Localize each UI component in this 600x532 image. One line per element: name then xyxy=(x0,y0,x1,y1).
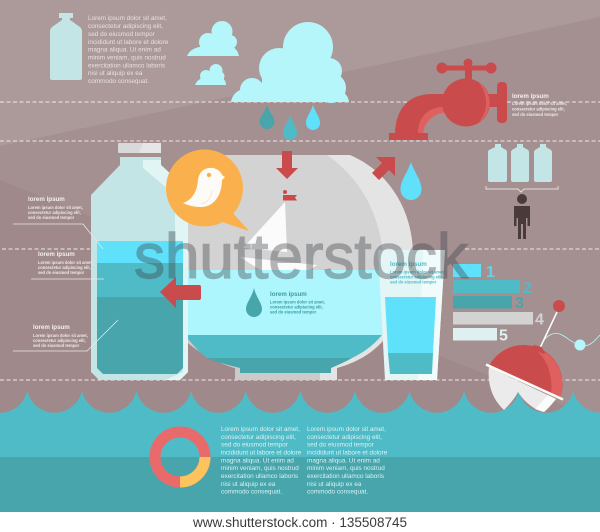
text block: bottom left: commodo consequat. xyxy=(221,489,282,496)
label: top bottle layer: sed do eiusmod tempor xyxy=(28,215,75,220)
text block: bottom right: commodo consequat. xyxy=(307,489,368,496)
bar chart: 2 xyxy=(523,280,532,297)
bowl drop xyxy=(246,288,262,317)
bar chart: 5 xyxy=(499,328,508,344)
label: middle bottle layer: lorem ipsum xyxy=(38,251,75,258)
label: faucet: sed do eiusmod tempor xyxy=(512,112,559,117)
icon: small cloud xyxy=(187,21,239,56)
large bottle xyxy=(91,143,188,380)
label: faucet: lorem ipsum xyxy=(512,93,549,100)
bowl label: Lorem ipsum dolor sit amet, xyxy=(270,300,325,304)
footer text: www.shutterstock.com · 135508745 xyxy=(192,515,407,530)
diagonal arrow xyxy=(372,157,395,180)
icon: person xyxy=(514,194,530,239)
text block: bottom right: nisi ut aliquip ex ea xyxy=(307,481,362,488)
text block: bottom right: consectetur adipiscing elit, xyxy=(307,434,382,441)
left arrow xyxy=(160,277,201,308)
glass label: Lorem ipsum dolor sit amet, xyxy=(390,270,445,274)
text block: bottom right: magna aliqua. Ut enim ad xyxy=(307,457,380,464)
text block: bottom left: Lorem ipsum dolor sit amet, xyxy=(221,426,300,433)
icon: faucet xyxy=(389,58,507,140)
bowl label: lorem ipsum xyxy=(270,291,307,298)
bowl label: consectetur adipiscing elit, xyxy=(270,304,323,310)
sea xyxy=(0,391,600,512)
text block: bottom left: nisi ut aliquip ex ea xyxy=(221,481,276,488)
label: bottom bottle layer: sed do eiusmod tempor xyxy=(33,343,80,348)
icon: tiny cloud xyxy=(195,64,226,85)
text block: top intro: minim veniam, quis nostrud xyxy=(88,54,166,61)
glass label: sed do eiusmod tempor xyxy=(390,280,437,284)
icon: three bottles xyxy=(488,144,552,182)
leader lines xyxy=(13,224,118,351)
text block: bottom right: sed do eiusmod tempor xyxy=(307,442,375,449)
text block: top intro: nisi ut aliquip ex ea xyxy=(88,70,143,77)
icon: small bottle xyxy=(50,13,82,80)
bar chart xyxy=(453,264,544,344)
text block: top intro: exercitation ullamco laboris xyxy=(88,62,165,69)
glass label: consectetur adipiscing elit, xyxy=(390,274,443,280)
bracket xyxy=(486,186,558,192)
speech bubble with bird xyxy=(166,150,249,231)
bowl label: sed do eiusmod tempor xyxy=(270,310,317,314)
icon: rain drops xyxy=(260,105,320,140)
fishing float xyxy=(486,300,600,412)
text block: bottom left: sed do eiusmod tempor xyxy=(221,442,289,449)
text block: top intro: consectetur adipiscing elit, xyxy=(88,23,163,30)
text block: bottom left: minim veniam, quis nostrud xyxy=(221,465,299,472)
glass xyxy=(378,250,445,380)
label: middle bottle layer: Lorem ipsum dolor sit amet, xyxy=(38,260,93,265)
fish bowl xyxy=(188,155,413,380)
text block: bottom right: exercitation ullamco laboris xyxy=(307,473,384,480)
label: top bottle layer: consectetur adipiscing elit, xyxy=(28,210,81,215)
bar chart: 3 xyxy=(515,295,524,312)
label: bottom bottle layer: Lorem ipsum dolor sit amet, xyxy=(33,333,88,338)
text block: top intro: Lorem ipsum dolor sit amet, xyxy=(88,15,167,22)
label: middle bottle layer: consectetur adipiscing elit, xyxy=(38,265,91,270)
label: top bottle layer: Lorem ipsum dolor sit amet, xyxy=(28,205,83,210)
bar chart: 1 xyxy=(486,264,495,281)
down arrow xyxy=(276,151,298,179)
text block: bottom right: Lorem ipsum dolor sit amet, xyxy=(307,426,386,433)
icon: bird xyxy=(183,168,225,207)
footer band xyxy=(0,512,600,532)
label: bottom bottle layer: lorem ipsum xyxy=(33,324,70,331)
watermark: shutterstock xyxy=(134,222,468,292)
bar chart: 4 xyxy=(535,312,544,328)
text block: top intro: incididunt ut labore et dolore xyxy=(88,39,169,46)
text block: bottom right: incididunt ut labore et dolore xyxy=(307,449,388,456)
label: faucet: Lorem ipsum dolor sit amet, xyxy=(512,101,567,106)
text block: top intro: sed do eiusmod tempor xyxy=(88,31,156,38)
label: middle bottle layer: sed do eiusmod tempor xyxy=(38,270,85,275)
text block: bottom left: magna aliqua. Ut enim ad xyxy=(221,457,294,464)
text block: bottom left: incididunt ut labore et dolore xyxy=(221,449,302,456)
text block: top intro: commodo consequat. xyxy=(88,78,149,85)
donut chart xyxy=(155,432,205,482)
text block: bottom right: minim veniam, quis nostrud xyxy=(307,465,385,472)
drop: big xyxy=(400,162,422,200)
text block: bottom left: exercitation ullamco laboris xyxy=(221,473,298,480)
bottle water xyxy=(97,241,183,263)
label: faucet: consectetur adipiscing elit, xyxy=(512,106,565,112)
icon: big cloud xyxy=(231,22,349,103)
text block: top intro: magna aliqua. Ut enim ad xyxy=(88,47,161,54)
boat xyxy=(240,190,317,270)
bowl water xyxy=(188,270,392,335)
label: top bottle layer: lorem ipsum xyxy=(28,196,65,203)
label: bottom bottle layer: consectetur adipiscing elit, xyxy=(33,338,86,343)
text block: bottom left: consectetur adipiscing elit, xyxy=(221,434,296,441)
glass label: lorem ipsum xyxy=(390,261,427,268)
bowl air area xyxy=(188,155,384,270)
